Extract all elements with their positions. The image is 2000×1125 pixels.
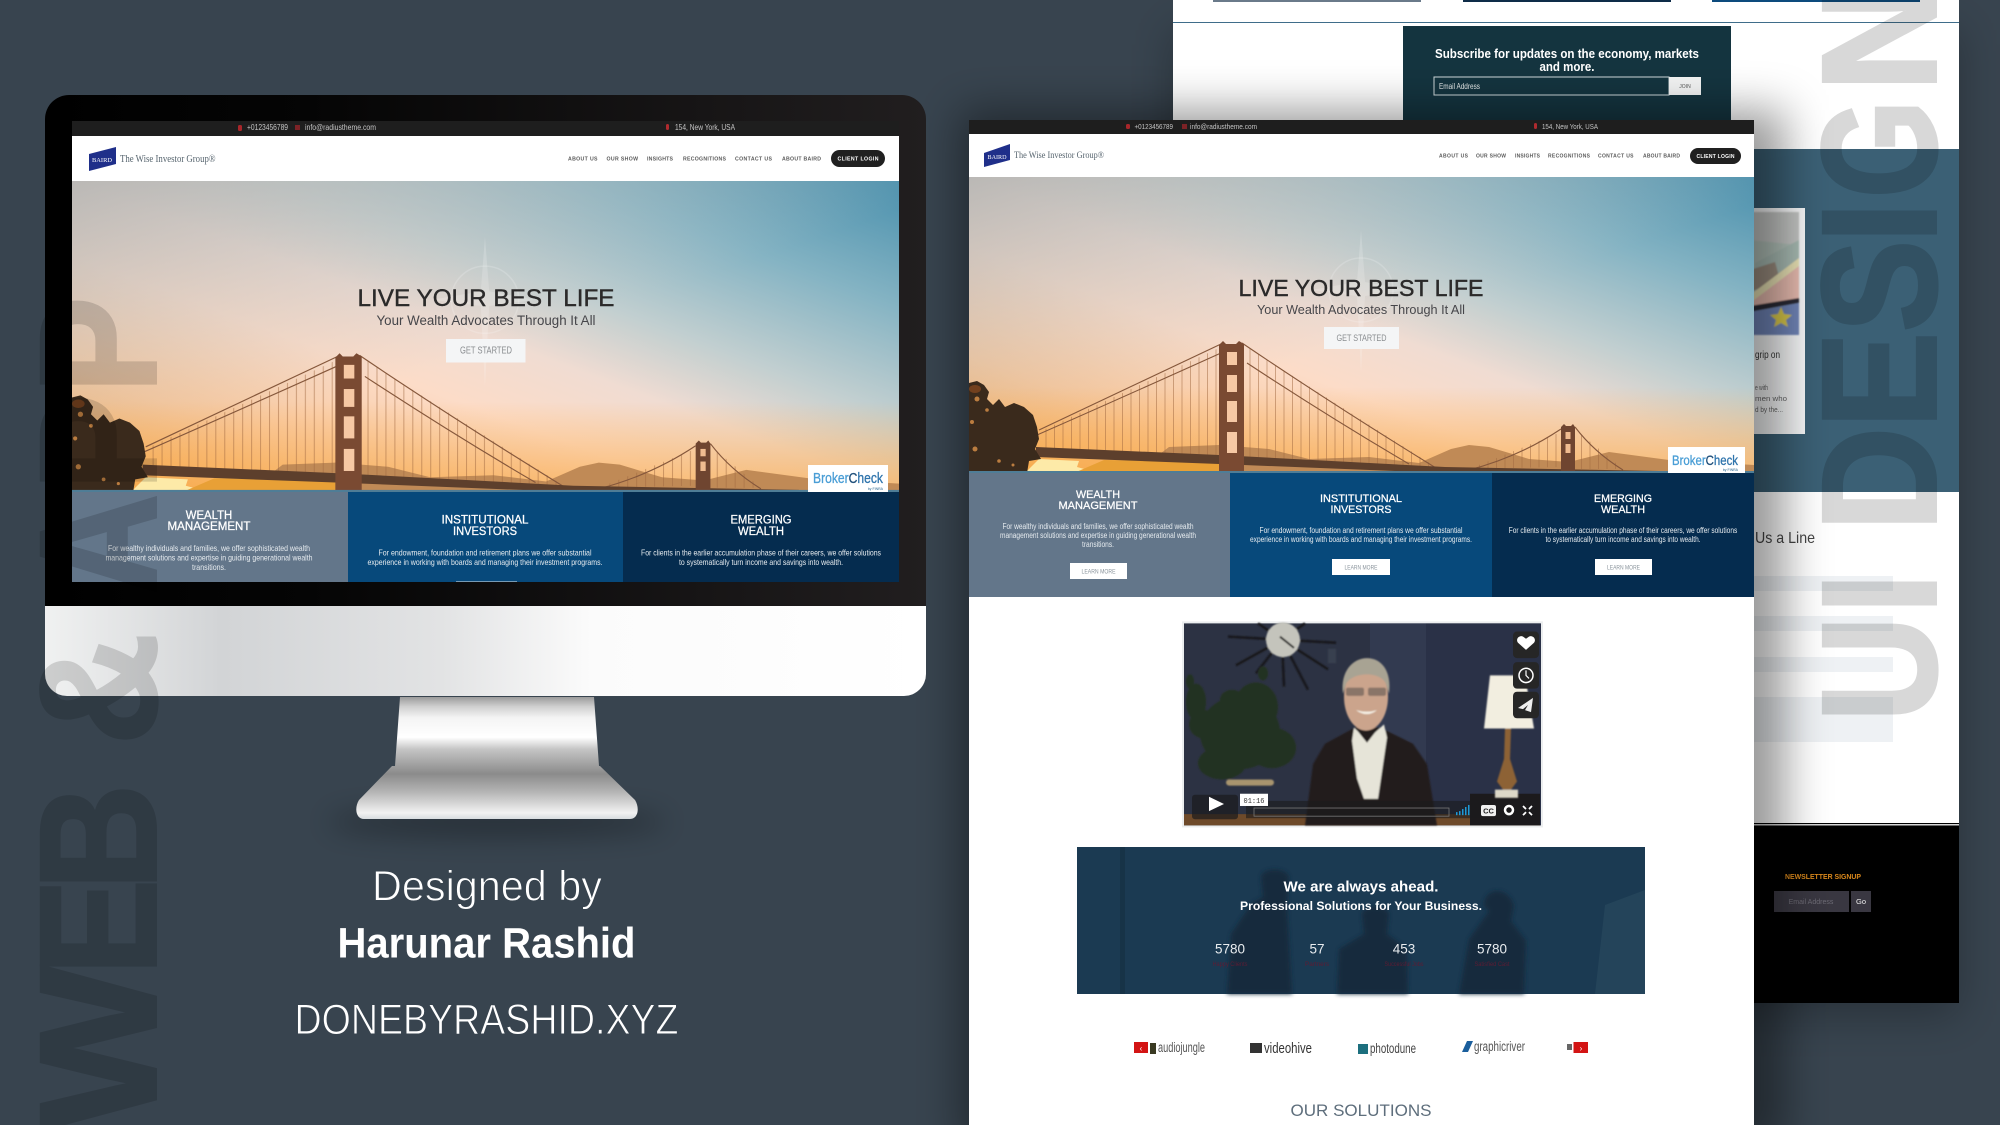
screen nav bar: The Wise Investor Group® — [120, 154, 216, 165]
watermark: WEB & APP: B — [6, 784, 192, 890]
stats banner: 453 — [1393, 942, 1415, 956]
nav bar: INSIGHTS — [1515, 154, 1541, 160]
service panel: emerging wealth: LEARN MORE — [1607, 564, 1641, 572]
service panel: institutional investors: INSTITUTIONAL — [1320, 493, 1402, 505]
icon: paper plane — [1513, 692, 1539, 718]
screen nav bar: RECOGNITIONS — [683, 156, 727, 162]
website: DONEBYRASHID.XYZ — [294, 996, 678, 1044]
video art: plant — [1186, 666, 1296, 786]
partner logos row: graphicriver — [1474, 1039, 1525, 1054]
watermark: WEB & APP: P — [6, 297, 192, 393]
screen panel: emerging wealth: to systematically turn income and savings into wealth. — [679, 557, 843, 567]
partner logos row: audiojungle — [1158, 1040, 1205, 1055]
heading: our solutions: OUR SOLUTIONS — [1290, 1101, 1432, 1120]
banner art: silhouettes — [1227, 870, 1526, 994]
subscribe box — [1403, 26, 1731, 126]
screen panel: wealth management: WEALTH — [186, 510, 232, 522]
watermark: WEB & APP — [6, 297, 192, 1125]
icon: clock — [1513, 662, 1539, 689]
screen panel: wealth management: For wealthy individuals and families, we offer sophisticated wealth — [108, 543, 310, 553]
subscribe box: Email Address — [1439, 81, 1480, 91]
service panel: emerging wealth — [1492, 473, 1754, 597]
watermark: WEB & APP: & — [6, 633, 192, 745]
service panel: wealth management: LEARN MORE — [1082, 568, 1116, 576]
designer name: Harunar Rashid — [338, 920, 636, 968]
stats banner: 5780 — [1477, 942, 1507, 956]
bezel — [45, 95, 926, 606]
partner logos row: ‹ — [1140, 1044, 1143, 1053]
service panel: emerging wealth: EMERGING — [1594, 493, 1652, 505]
page sheet — [969, 120, 1754, 1125]
screen hero: by FINRA — [868, 487, 884, 491]
designed by: Designed by — [372, 862, 602, 910]
video player — [1182, 621, 1543, 827]
screen top bar — [72, 121, 899, 136]
top bar: info@radiustheme.com — [1190, 122, 1257, 131]
screen panel: emerging wealth — [623, 492, 899, 582]
screen panel: wealth management — [72, 492, 348, 582]
service panel: institutional investors: For endowment, foundation and retirement plans we offer substantial — [1260, 526, 1463, 535]
footer — [1173, 823, 1959, 1003]
back page shadow — [1173, 30, 1959, 1015]
video controls — [1192, 794, 1538, 819]
video controls: CC — [1483, 807, 1494, 816]
screen nav bar: CLIENT LOGIN — [838, 156, 879, 162]
screen panel: wealth management: MANAGEMENT — [168, 521, 250, 533]
screen top bar: 154, New York, USA — [675, 123, 736, 132]
watermark: WEB & APP: P — [6, 394, 192, 490]
top bar: +0123456789 — [1134, 122, 1173, 131]
stats banner: 5780 — [1215, 942, 1245, 956]
monitor stand shadow — [327, 808, 667, 836]
nav bar: ABOUT BAIRD — [1643, 154, 1680, 160]
watermark: WEB & APP: A — [6, 494, 192, 594]
hero: GET STARTED — [1336, 333, 1387, 344]
video art: clock — [1228, 622, 1336, 690]
blue band — [1173, 149, 1959, 492]
screen hero: Your Wealth Advocates Through It All — [376, 313, 596, 328]
footer: Go — [1856, 897, 1866, 906]
screen panel: institutional investors: INSTITUTIONAL — [442, 514, 529, 526]
stats banner: Partners — [1305, 962, 1329, 968]
article card: men who — [1755, 396, 1787, 403]
service panel: wealth management: MANAGEMENT — [1058, 500, 1138, 512]
service panel: wealth management: management solutions and expertise in guiding generational wealth — [1000, 531, 1196, 540]
video controls: 01:16 — [1244, 798, 1264, 806]
nav bar: ABOUT US — [1439, 154, 1469, 160]
back page sheet — [1173, 0, 1959, 825]
screen hero — [72, 181, 899, 492]
chin — [45, 606, 926, 696]
subscribe box: Subscribe for updates on the economy, markets — [1435, 46, 1699, 61]
nav bar — [969, 134, 1754, 177]
watermark: UI DESIGN: U — [1788, 616, 1970, 722]
front page mockup — [969, 120, 1754, 1125]
footer: NEWSLETTER SIGNUP — [1785, 872, 1861, 881]
subscribe box: and more. — [1540, 59, 1594, 74]
screen hero: LIVE YOUR BEST LIFE — [358, 285, 614, 312]
nav bar: The Wise Investor Group® — [1014, 150, 1104, 161]
contact heading: Us a Line — [1755, 530, 1815, 547]
monitor — [45, 95, 926, 819]
screen top bar: +0123456789 — [247, 123, 288, 132]
screen panel: emerging wealth: WEALTH — [738, 526, 784, 538]
hero: Your Wealth Advocates Through It All — [1257, 302, 1465, 317]
service panel: emerging wealth: WEALTH — [1601, 504, 1645, 516]
footer: Email Address — [1789, 899, 1834, 906]
stats banner: Happy Clients — [1212, 962, 1248, 968]
screen nav bar: INSIGHTS — [647, 156, 674, 162]
nav bar: CONTACT US — [1598, 154, 1634, 160]
service panel: wealth management: WEALTH — [1076, 489, 1120, 501]
watermark: WEB & APP: E — [6, 879, 192, 975]
nav bar: BAIRD — [988, 155, 1007, 161]
top bar — [969, 120, 1754, 134]
partner logos row: videohive — [1264, 1040, 1312, 1057]
card image: banknotes — [1750, 212, 1799, 335]
nav bar: CLIENT LOGIN — [1696, 154, 1735, 160]
screen nav bar: ABOUT BAIRD — [782, 156, 821, 162]
screen panel: wealth management: transitions. — [192, 562, 226, 572]
partner logos row: photodune — [1370, 1041, 1416, 1056]
top card strips — [1173, 0, 1959, 23]
screen panel: emerging wealth: EMERGING — [730, 514, 792, 526]
video art: lamp — [1484, 675, 1534, 798]
hero: LIVE YOUR BEST LIFE — [1238, 275, 1484, 301]
service panel: wealth management: For wealthy individuals and families, we offer sophisticated wealth — [1002, 522, 1194, 531]
subscribe box: JOIN — [1679, 84, 1691, 90]
screen panel: institutional investors — [348, 492, 623, 582]
screen nav bar: CONTACT US — [735, 156, 773, 162]
screen hero: BrokerCheck — [813, 471, 884, 487]
service panel: wealth management — [969, 473, 1230, 597]
back page mockup — [1173, 0, 1959, 1015]
watermark: UI DESIGN: S — [1788, 240, 1970, 332]
hero: BrokerCheck — [1672, 452, 1739, 468]
watermark: UI DESIGN: E — [1788, 332, 1970, 428]
stand — [356, 697, 638, 819]
article card: grip on — [1755, 350, 1780, 361]
stats banner: Satisfied Cast — [1474, 962, 1510, 968]
partner logos row: › — [1580, 1044, 1583, 1053]
service panel: institutional investors — [1230, 473, 1492, 597]
service panel: emerging wealth: For clients in the earlier accumulation phase of their careers, we offer solutions — [1509, 526, 1737, 535]
screen top bar: info@radiustheme.com — [305, 123, 376, 132]
hero — [969, 177, 1754, 473]
screen hero: GET STARTED — [460, 346, 512, 356]
article card: e with — [1755, 385, 1768, 392]
watermark: UI DESIGN — [1788, 0, 1970, 722]
screen panel: emerging wealth: For clients in the earlier accumulation phase of their careers, we offer solutions — [641, 548, 881, 558]
stats banner: We are always ahead. — [1284, 880, 1438, 896]
screen panel: wealth management: management solutions and expertise in guiding generational wealth — [106, 552, 313, 562]
stats banner — [1077, 847, 1645, 994]
screen nav bar — [72, 136, 899, 181]
front page shadow — [960, 110, 1785, 1125]
service panel: emerging wealth: to systematically turn income and savings into wealth. — [1546, 535, 1700, 544]
watermark: UI DESIGN: I — [1788, 573, 1970, 614]
article card — [1700, 208, 1805, 434]
article card: d by the... — [1755, 407, 1783, 414]
service panel: institutional investors: LEARN MORE — [1344, 564, 1378, 572]
icon: heart — [1513, 632, 1539, 658]
stats banner: Successful Jobs — [1384, 962, 1424, 968]
nav bar: OUR SHOW — [1476, 154, 1506, 160]
service panel: wealth management: transitions. — [1082, 540, 1114, 549]
screen panel: institutional investors: For endowment, foundation and retirement plans we offer substantial — [378, 548, 592, 558]
screen nav bar: BAIRD — [92, 157, 112, 164]
stats banner: Professional Solutions for Your Business. — [1240, 899, 1482, 913]
screen nav bar: OUR SHOW — [606, 156, 638, 162]
screen panel: institutional investors: experience in working with boards and managing their investment programs. — [368, 557, 602, 567]
nav bar: RECOGNITIONS — [1548, 154, 1591, 160]
watermark: UI DESIGN: D — [1788, 427, 1970, 531]
designer credit — [294, 862, 678, 1044]
watermark: UI DESIGN: I — [1788, 202, 1970, 243]
contact form fields — [1700, 576, 1893, 742]
stats banner: 57 — [1309, 942, 1325, 956]
video art: presenter — [1305, 658, 1437, 825]
service panel: institutional investors: experience in working with boards and managing their investment programs. — [1250, 535, 1472, 544]
service panel: institutional investors: INVESTORS — [1330, 504, 1392, 516]
screen nav bar: ABOUT US — [568, 156, 598, 162]
hero: by FINRA — [1723, 468, 1739, 472]
top bar: 154, New York, USA — [1542, 122, 1598, 131]
screen panel: institutional investors: INVESTORS — [453, 526, 517, 538]
watermark: UI DESIGN: G — [1788, 100, 1970, 198]
partner logos row — [1134, 1039, 1588, 1057]
